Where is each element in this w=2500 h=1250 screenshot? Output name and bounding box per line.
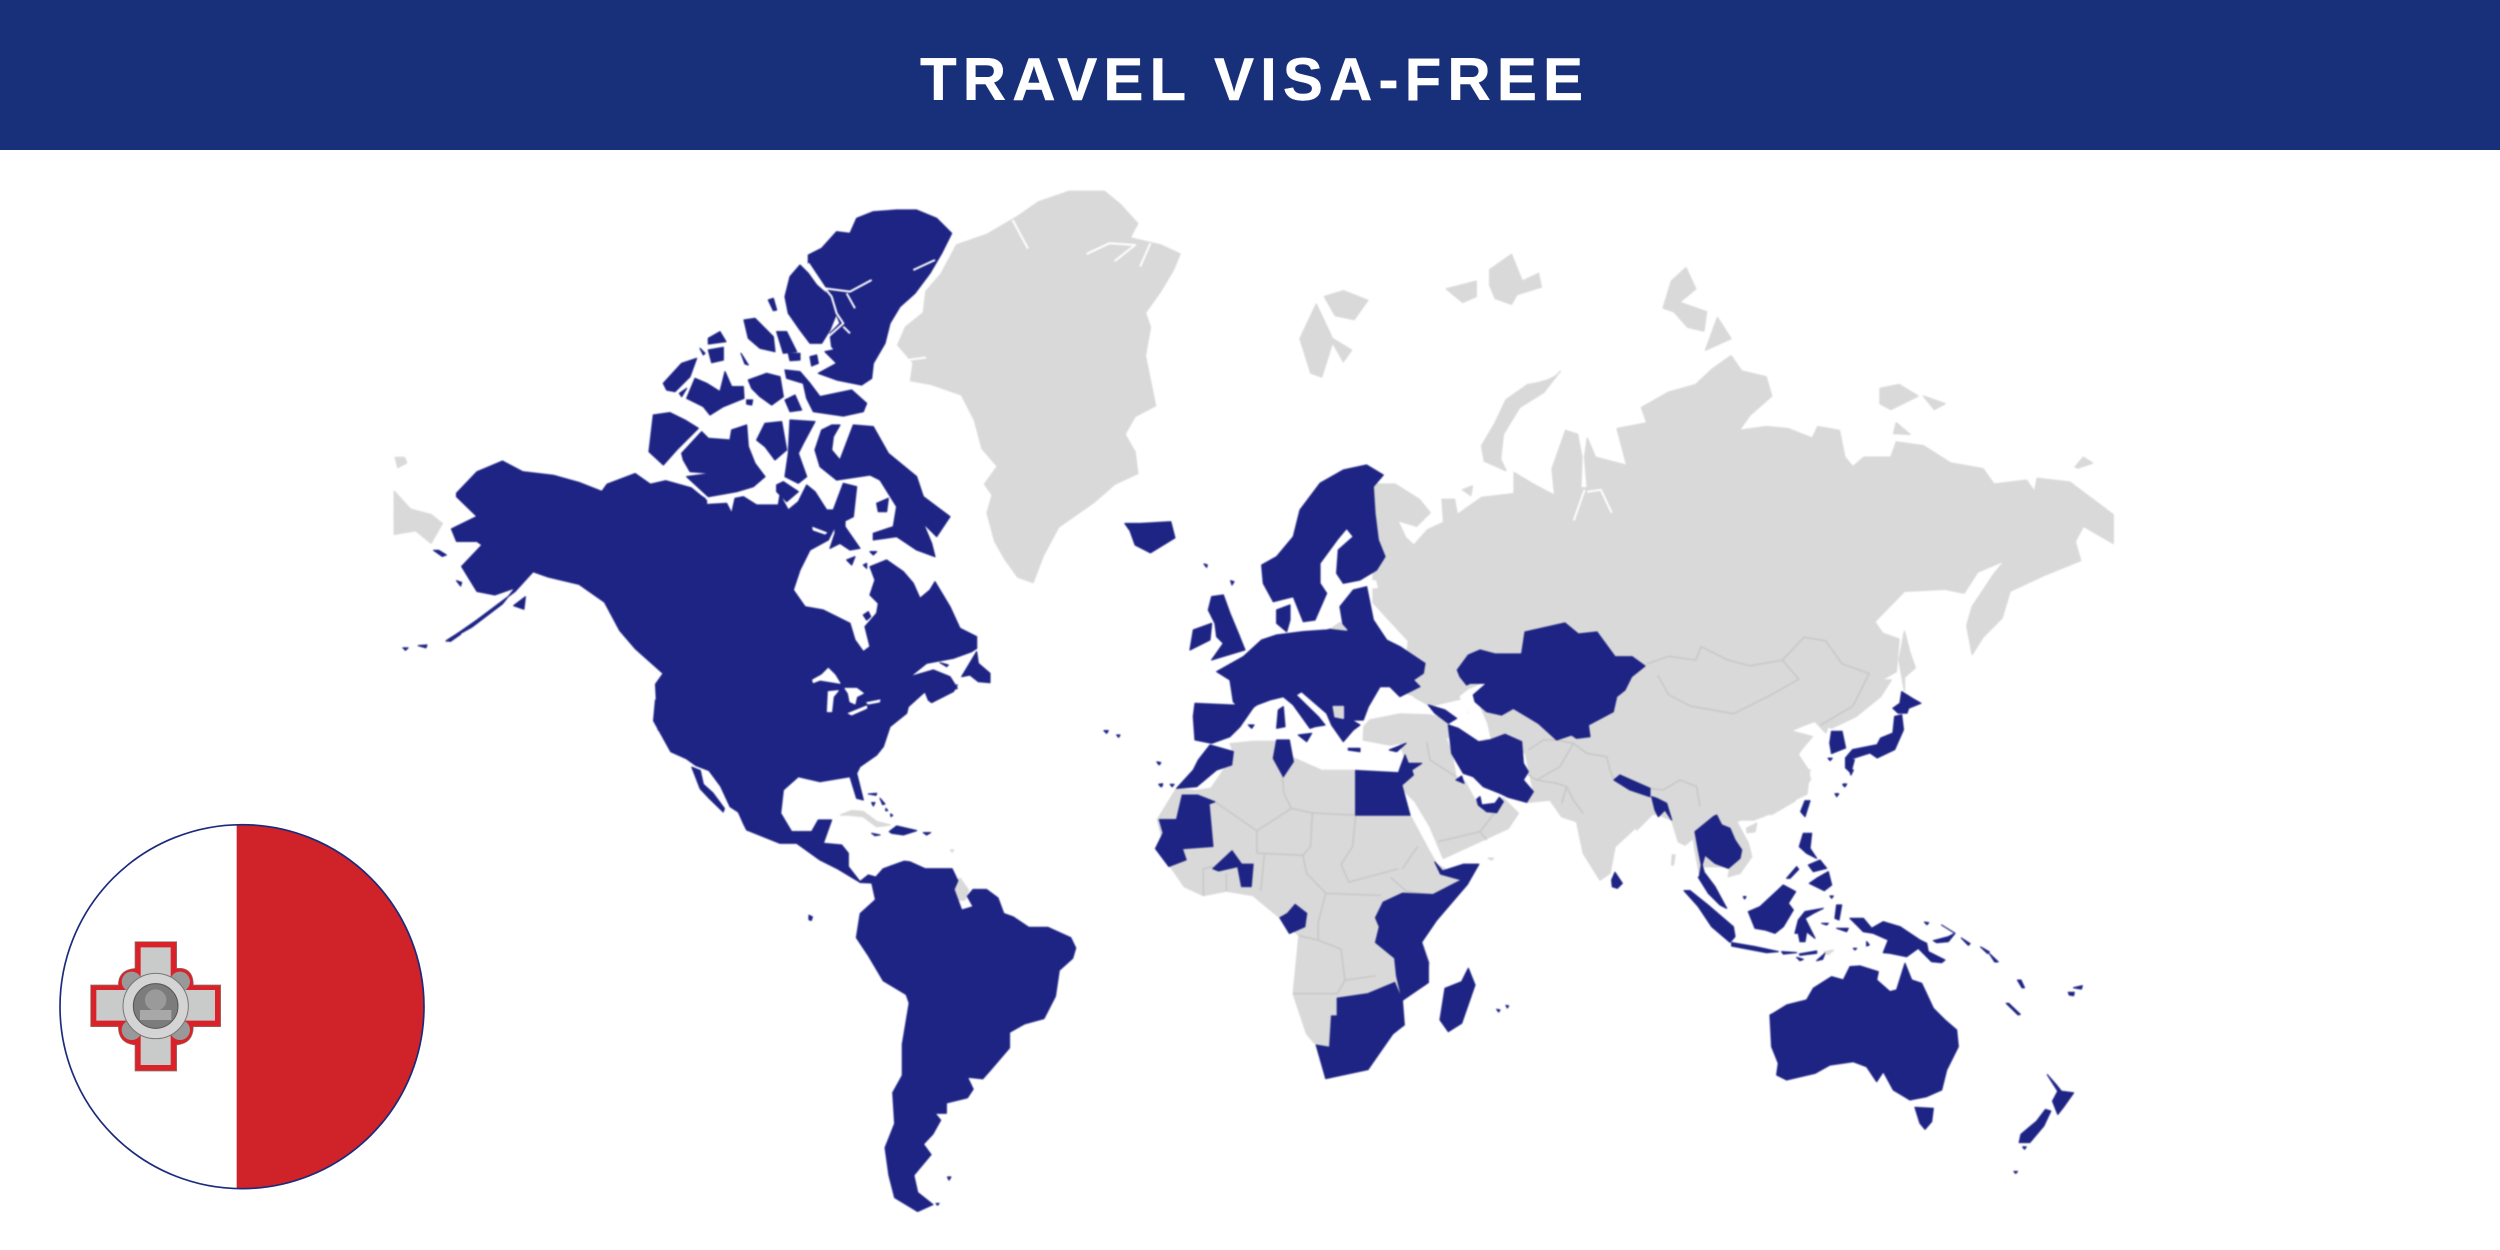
Cuba <box>841 811 968 900</box>
visa-free countries <box>403 210 2082 1211</box>
Turkey, Arabia and South Asia <box>1363 707 1673 880</box>
Ellesmere and Arctic channels <box>808 260 935 350</box>
Macedonia and Kaliningrad <box>1332 623 1347 718</box>
mainland Southeast Asia <box>1637 770 1810 877</box>
Western USA, Mexico and South America <box>654 700 1174 1211</box>
title banner <box>0 0 2500 150</box>
Canadian Arctic islands <box>649 210 952 557</box>
Middle East, Central and South Asia <box>1389 623 1672 1032</box>
African borders <box>1203 741 1437 994</box>
Lake and strait details <box>813 527 880 715</box>
George Cross <box>91 942 221 1071</box>
Greenland fjords <box>900 220 1150 361</box>
title: TRAVEL VISA-FREE <box>920 46 1583 113</box>
Middle East and South Asian borders <box>1427 740 1700 842</box>
seas <box>1364 683 1490 738</box>
Africa <box>1157 741 1464 1079</box>
West, Central and Southern Africa <box>1155 771 1479 1079</box>
East Asia and Pacific <box>1828 692 2082 1173</box>
Eastern Canada, USA and Central America <box>697 483 1120 883</box>
flag disc <box>60 825 424 1189</box>
Alaska and western Canada <box>403 461 1175 730</box>
Ob river <box>1574 490 1612 520</box>
Europe and North Africa <box>1157 465 1425 788</box>
Gulf of Finland <box>1353 581 1377 590</box>
country borders <box>1203 637 1869 994</box>
Russia and East Asia <box>1300 254 2113 802</box>
Asian borders <box>1647 637 1869 725</box>
Greenland <box>394 191 1180 582</box>
flag of Malta <box>59 824 425 1190</box>
China and Korea <box>1600 680 1891 955</box>
Southeast Asia and Australia <box>1684 770 1958 1129</box>
